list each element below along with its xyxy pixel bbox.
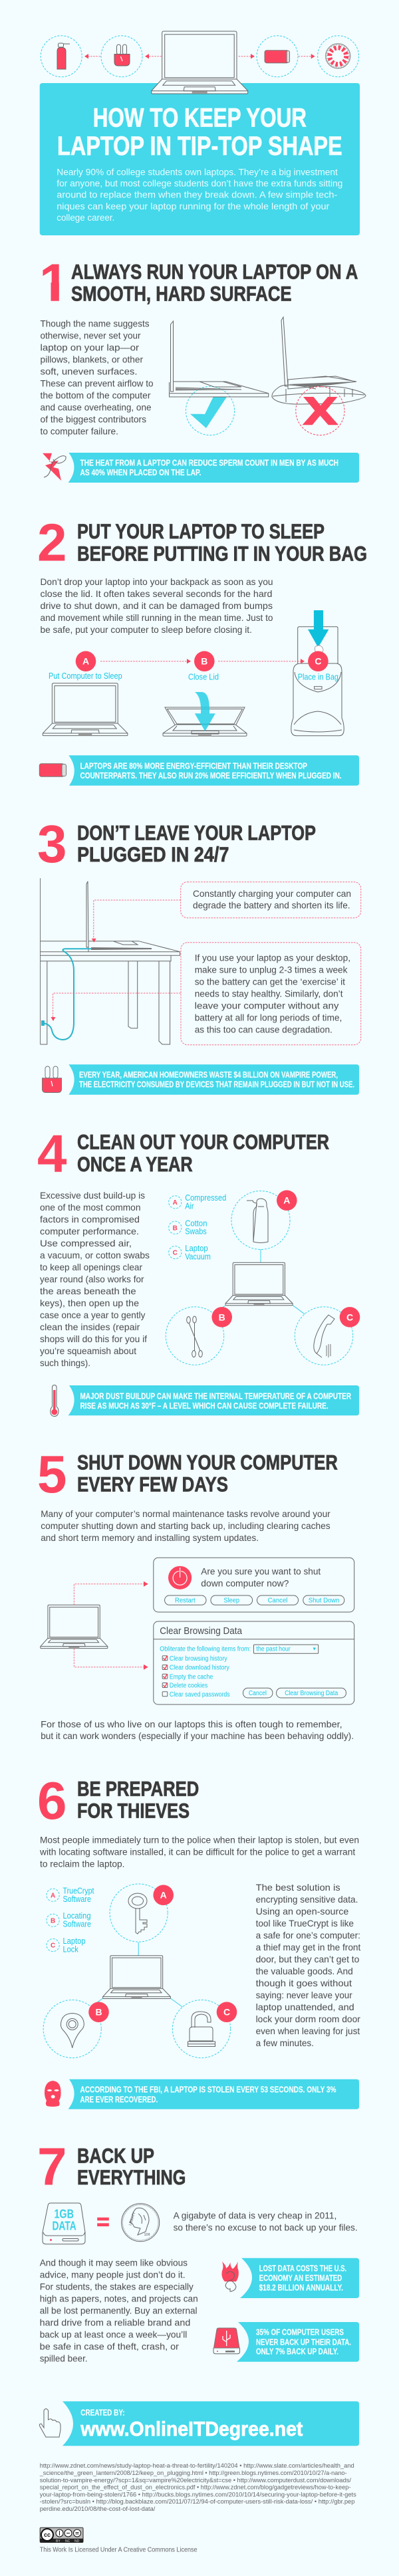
callout text 7b: NEVER BACK UP THEIR DATA.	[256, 2337, 351, 2347]
icon: burning dollar	[222, 2262, 239, 2291]
creative commons badge: ND	[74, 2539, 80, 2543]
side text 6: Using an open-source	[256, 1906, 349, 1917]
clear browsing data dialog	[154, 1621, 354, 1704]
intro text: around to replace them when they break down. A few simple tech-	[57, 189, 338, 200]
heading 3	[77, 820, 316, 866]
body text 2: Don’t drop your laptop into your backpack as soon as you	[40, 576, 273, 587]
callout text 4	[80, 1391, 351, 1411]
references: perdine.edu/2010/08/the-cost-of-lost-data/	[40, 2505, 156, 2512]
hard drive with 1GB data label: DATA	[52, 2218, 76, 2232]
callout box: unplug: battery at all for long periods of time,	[195, 1012, 342, 1023]
legend: security tools: B	[51, 1917, 55, 1925]
body text 4: you’re squeamish about	[40, 1346, 136, 1356]
time range select	[160, 1645, 319, 1653]
legend: cleaning tools: A	[173, 1199, 178, 1207]
body text 4: one of the most common	[40, 1202, 141, 1213]
body text 4: shops will do this for you if	[40, 1334, 147, 1344]
tool C: open padlock: C	[223, 2007, 230, 2018]
checkbox list: Delete cookies	[170, 1683, 207, 1690]
icon: thermometer	[51, 1385, 59, 1416]
heading 6: FOR THIEVES	[77, 1798, 190, 1822]
heading 2: PUT YOUR LAPTOP TO SLEEP	[77, 519, 325, 543]
legend: security tools: C	[51, 1942, 55, 1950]
time range select: the past hour	[256, 1646, 291, 1653]
gigabyte text: so there’s no excuse to not back up your files.	[174, 2222, 358, 2233]
callout box: unplug: make sure to unplug 2-3 times a week	[195, 965, 348, 975]
callout box: charging	[181, 882, 361, 918]
badge C: C	[315, 656, 321, 667]
step labels	[49, 671, 338, 682]
icon: battery	[39, 764, 66, 776]
created by text: CREATED BY:	[80, 2407, 125, 2417]
callout text 1: AS 40% WHEN PLACED ON THE LAP.	[80, 467, 201, 477]
title panel	[40, 83, 360, 235]
body text 4: the areas beneath the	[40, 1286, 136, 1296]
number 1: 1	[39, 253, 69, 312]
legend: cleaning tools	[169, 1193, 226, 1261]
side text 6: encrypting sensitive data.	[256, 1894, 358, 1905]
step labels: Place in Bag	[298, 673, 338, 682]
shutdown dialog	[154, 1558, 354, 1612]
heading 1: SMOOTH, HARD SURFACE	[71, 282, 292, 306]
badge C	[308, 651, 329, 671]
connector lines	[96, 1942, 182, 2007]
body text 7	[40, 2258, 198, 2364]
legend: security tools	[47, 1886, 94, 1954]
callout text 4: RISE AS MUCH AS 30°F – A LEVEL WHICH CAN CAUSE COMPLETE FAILURE.	[80, 1401, 329, 1411]
body text 7: advice, many people just don’t do it.	[40, 2270, 186, 2280]
heading 4: CLEAN OUT YOUR COMPUTER	[77, 1130, 329, 1154]
side text 6: a few minutes.	[256, 2038, 314, 2048]
body text 2: and movement while still running in the mean time. Just to	[40, 612, 273, 623]
legend: cleaning tools: Cotton	[185, 1219, 207, 1228]
icon: power button	[168, 1566, 192, 1589]
body text 7: hard drive from a reliable brand and	[40, 2317, 190, 2328]
references	[39, 2462, 356, 2512]
body text 1: These can prevent airflow to	[40, 378, 154, 389]
body text 4: factors in compromised	[40, 1214, 140, 1225]
gigabyte text: A gigabyte of data is very cheap in 2011,	[174, 2210, 336, 2221]
references: _science/the_green_lantern/2008/12/keep_on_plugging.html • http://green.blogs.nytimes.com/2010/10/27/a-nano-	[39, 2469, 347, 2476]
dialog question	[201, 1566, 321, 1588]
arrows between icons	[84, 54, 315, 59]
callout text 2	[80, 761, 342, 780]
creative commons badge: NC	[65, 2539, 70, 2543]
icon: battery	[257, 36, 298, 77]
number 2: 2	[37, 513, 66, 572]
closing text 5	[41, 1718, 354, 1741]
dialog buttons: Cancel	[268, 1597, 287, 1605]
arrows from laptop to dialogs	[74, 1581, 148, 1670]
badge B	[194, 651, 215, 671]
clear dialog buttons: Clear Browsing Data	[285, 1690, 338, 1697]
arrow into bag	[308, 610, 329, 647]
callout 3	[43, 1064, 359, 1095]
callout text 7a: ECONOMY AN ESTIMATED	[259, 2273, 342, 2283]
checkbox list: Clear browsing history	[170, 1655, 227, 1663]
icon: main laptop	[152, 31, 248, 94]
body text 7: back up at least once a week—you’ll	[40, 2329, 187, 2340]
body text 1: the bottom of the computer	[40, 390, 151, 401]
body text 6: to reclaim the laptop.	[40, 1858, 125, 1869]
heading 2	[77, 519, 367, 565]
time range select: Obliterate the following items from:	[160, 1645, 251, 1653]
tool A: air can	[231, 1190, 297, 1250]
number 4: 4	[37, 1124, 67, 1183]
legend: security tools: TrueCrypt	[63, 1886, 94, 1895]
tool A: air can: A	[283, 1195, 290, 1206]
icon: cooling fan	[318, 36, 359, 77]
heading 4: ONCE A YEAR	[77, 1152, 193, 1176]
desk with laptop illustration	[40, 878, 180, 1044]
side text 6: door, but they can’t get to	[256, 1954, 360, 1964]
side text 6: lock your dorm room door	[256, 2014, 360, 2024]
callout text 1	[80, 458, 338, 477]
side text 6	[256, 1882, 360, 2048]
laptop on pillow with X	[272, 317, 366, 435]
callout box: unplug: as this too can cause degradation.	[195, 1024, 332, 1035]
callout 4	[51, 1385, 359, 1416]
section 7	[37, 2137, 359, 2364]
icon: lightning and sperm	[43, 453, 66, 481]
side text 6: The best solution is	[256, 1882, 340, 1893]
dialog buttons: Restart	[175, 1597, 196, 1605]
number 3: 3	[37, 814, 66, 874]
callout 7b	[213, 2322, 359, 2362]
laptop 4	[225, 1262, 293, 1306]
body text 1	[40, 318, 154, 437]
body text 5: and short term memory and installing system updates.	[41, 1532, 259, 1543]
icon: pointing hand	[39, 2409, 61, 2437]
body text 4: such things).	[40, 1357, 90, 1368]
heading 6: BE PREPARED	[77, 1777, 199, 1801]
section 5	[37, 1445, 354, 1741]
legend: security tools: Locating	[63, 1911, 91, 1921]
callout text 2: LAPTOPS ARE 80% MORE ENERGY-EFFICIENT THAN THEIR DESKTOP	[80, 761, 307, 771]
body text 1: to computer failure.	[40, 426, 118, 437]
body text 4: keys), then open up the	[40, 1298, 139, 1308]
badge A	[76, 651, 96, 671]
power cable	[43, 949, 92, 1040]
callout 7a	[222, 2258, 359, 2298]
icon: dime: LIBERTY	[128, 2212, 136, 2226]
closing text 5: For those of us who live on our laptops this is often tough to remember,	[41, 1718, 342, 1729]
callout text 7b: ONLY 7% BACK UP DAILY.	[256, 2347, 338, 2357]
body text 7: For students, the stakes are especially	[40, 2282, 194, 2292]
intro text	[57, 166, 342, 223]
icon: usb drive	[213, 2328, 239, 2354]
tool C: vacuum	[295, 1307, 360, 1365]
body text 4: year round (also works for	[40, 1274, 144, 1284]
dialog buttons: Sleep	[223, 1597, 239, 1605]
clear dialog buttons	[243, 1688, 346, 1698]
intro text: Nearly 90% of college students own laptops. They’re a big investment	[57, 166, 338, 177]
creative commons badge: BY	[56, 2539, 61, 2543]
icon: compressed air can	[41, 36, 82, 77]
step A laptop	[43, 683, 128, 736]
body text 2	[40, 576, 273, 635]
tool C: vacuum: C	[346, 1312, 353, 1322]
heading 3: DON’T LEAVE YOUR LAPTOP	[77, 820, 316, 844]
legend: cleaning tools: Laptop	[185, 1244, 208, 1253]
intro text: for anyone, but most college students don’t have the extra funds sitting	[57, 178, 342, 189]
icon: thief mask	[45, 2081, 61, 2107]
step C backpack	[291, 610, 344, 736]
callout text 7a: LOST DATA COSTS THE U.S.	[259, 2264, 346, 2274]
body text 7: high as papers, notes, and projects can	[40, 2293, 198, 2304]
equals sign	[97, 2218, 109, 2226]
callout text 7b: 35% OF COMPUTER USERS	[256, 2327, 344, 2337]
tool B: location pin	[43, 2000, 109, 2058]
body text 7: be safe in case of theft, crash, or	[40, 2341, 179, 2352]
callout box: unplug	[181, 943, 361, 1045]
legend: security tools: A	[51, 1892, 55, 1900]
body text 4: clean the insides (repair	[40, 1322, 140, 1332]
heading 3: PLUGGED IN 24/7	[77, 842, 229, 866]
clear dialog buttons: Cancel	[249, 1690, 267, 1697]
body text 4: Excessive dust build-up is	[40, 1190, 145, 1201]
laptop 6	[103, 1956, 170, 1999]
tool B: cotton swabs: B	[219, 1312, 225, 1322]
body text 4: case once a year to gently	[40, 1310, 145, 1320]
body text 1: pillows, blankets, or other	[40, 354, 143, 365]
side text 6: the valuable goods. And	[256, 1966, 353, 1976]
number 7: 7	[37, 2137, 66, 2196]
body text 7: And though it may seem like obvious	[40, 2258, 188, 2268]
body text 1: laptop on your lap—or	[40, 342, 139, 353]
number 1	[43, 265, 59, 301]
body text 2: drive to shut down, and it can be damaged from bumps	[40, 600, 273, 611]
callout text 3	[79, 1070, 354, 1090]
checkbox list: Clear saved passwords	[170, 1691, 230, 1698]
connector lines	[219, 1249, 305, 1314]
callout text 7a	[259, 2264, 346, 2292]
tool B: location pin: B	[95, 2007, 102, 2018]
callout box: unplug: leave your computer without any	[195, 1000, 338, 1011]
closing text 5: but it can work wonders (especially if your machine has been behaving oddly).	[41, 1730, 354, 1741]
created by text	[80, 2407, 303, 2440]
body text 6: with locating software installed, it can be difficult for the police to get a warrant	[39, 1846, 355, 1857]
heading 1	[71, 259, 358, 306]
callout box: unplug: so the battery can get the ‘exercise’ it	[195, 977, 345, 987]
legend: security tools: Laptop	[63, 1936, 86, 1946]
callout 6	[45, 2079, 359, 2109]
created by text: www.OnlineITDegree.net	[80, 2417, 303, 2440]
icon: dime: 10¢	[144, 2233, 150, 2237]
references: special_report_on_the_effect_of_dust_on_electronics.pdf • http://www.zdnet.com/blog/gadgetreviews/how-to-keep-	[40, 2484, 350, 2491]
checkbox list	[162, 1655, 230, 1698]
legend: security tools: Software	[63, 1895, 91, 1904]
number 6: 6	[37, 1771, 66, 1830]
dialog question: Are you sure you want to shut	[201, 1566, 321, 1576]
callout 2	[39, 755, 359, 786]
created by banner	[39, 2401, 359, 2446]
gigabyte text	[174, 2210, 358, 2233]
badge B: B	[201, 656, 207, 667]
badge A: A	[82, 656, 89, 667]
dialog question: down computer now?	[201, 1578, 289, 1588]
pointer to outlet	[51, 993, 181, 1021]
body text 4: to keep all openings clear	[40, 1262, 142, 1272]
body text 5	[41, 1508, 331, 1543]
tool B: cotton swabs	[166, 1307, 232, 1365]
legend: cleaning tools: Air	[185, 1202, 194, 1211]
body text 1: otherwise, never set your	[40, 330, 141, 341]
section 6	[37, 1771, 360, 2109]
heading 6	[77, 1777, 199, 1822]
side text 6: a thief may get in the front	[256, 1942, 360, 1952]
icon: plug	[43, 1066, 61, 1093]
laptop on hard surface with check	[169, 321, 269, 435]
license text: This Work Is Licensed Under A Creative Commons License	[40, 2546, 198, 2554]
dialog buttons	[165, 1595, 344, 1605]
callout text 7a: $18.2 BILLION ANNUALLY.	[259, 2282, 343, 2292]
intro text: college career.	[57, 212, 114, 223]
laptop 5	[41, 1605, 108, 1649]
dialog buttons: Shut Down	[309, 1597, 340, 1605]
icon: dime	[122, 2204, 160, 2242]
references: -stolen/?src=busln • http://blog.backblaze.com/2011/07/12/94-of-computer-users-still-risk-data-loss/ • http://gbr.pep	[40, 2498, 354, 2505]
body text 7: spilled beer.	[40, 2353, 88, 2364]
body text 6	[39, 1834, 359, 1869]
icon: plug	[101, 36, 142, 77]
heading 7	[77, 2143, 186, 2189]
creative commons badge	[40, 2527, 84, 2543]
header icons row	[41, 36, 359, 77]
section 2	[37, 513, 367, 786]
body text 2: be safe, put your computer to sleep before closing it.	[40, 624, 252, 635]
legend: cleaning tools: B	[173, 1225, 178, 1232]
hard drive with 1GB data label: 1GB	[54, 2207, 74, 2221]
callout text 6	[80, 2085, 336, 2104]
callout box: unplug: If you use your laptop as your desktop,	[195, 953, 350, 963]
heading 5: EVERY FEW DAYS	[77, 1472, 228, 1496]
tool A: key	[110, 1884, 174, 1942]
callout box: charging: degrade the battery and shorten its life.	[193, 900, 350, 911]
legend: cleaning tools: Compressed	[185, 1193, 226, 1203]
heading 7: EVERYTHING	[77, 2165, 186, 2189]
body text 5: computer shutting down and starting back up, including clearing caches	[41, 1520, 331, 1531]
callout box: charging: Constantly charging your computer can	[193, 888, 351, 899]
references: http://www.zdnet.com/news/study-laptop-heat-a-threat-to-fertility/140204 • http://www.slate.com/articles/health_and	[40, 2462, 354, 2469]
step B laptop closing	[163, 692, 247, 736]
references: your-laptop-from-being-stolen/1766 • http://bucks.blogs.nytimes.com/2010/10/14/securing-your-laptop-before-it-gets	[40, 2490, 356, 2498]
number 5: 5	[37, 1445, 66, 1504]
heading 4	[77, 1130, 329, 1176]
legend: cleaning tools: Vacuum	[185, 1252, 211, 1261]
tool A: key: A	[160, 1890, 167, 1901]
callout text 7b	[256, 2327, 351, 2357]
step labels: Put Computer to Sleep	[49, 671, 122, 681]
callout text 6: ARE EVER RECOVERED.	[80, 2094, 158, 2104]
body text 1: soft, uneven surfaces.	[40, 366, 137, 377]
body text 7: all be lost permanently. Buy an external	[40, 2305, 198, 2316]
title: LAPTOP IN TIP-TOP SHAPE	[57, 132, 342, 161]
side text 6: saying: never leave your	[256, 1990, 352, 2000]
legend: security tools: Software	[63, 1920, 91, 1929]
body text 4: Use compressed air,	[40, 1238, 132, 1248]
body text 4	[40, 1190, 150, 1368]
body text 5: Many of your computer’s normal maintenance tasks revolve around your	[41, 1508, 331, 1519]
body text 1: and cause overheating, one	[40, 402, 152, 413]
body text 6: Most people immediately turn to the police when their laptop is stolen, but even	[40, 1834, 359, 1845]
checkbox list: Empty the cache	[170, 1673, 213, 1681]
body text 1: Though the name suggests	[40, 318, 149, 329]
heading 5	[77, 1451, 338, 1496]
body text 1: of the biggest contributors	[40, 414, 146, 425]
creative commons badge: cc	[44, 2531, 51, 2538]
hard drive with 1GB data label	[43, 2203, 85, 2244]
body text 4: a vacuum, or cotton swabs	[40, 1250, 150, 1260]
tool C: open padlock	[172, 2000, 237, 2058]
side text 6: though it goes without	[256, 1978, 352, 1988]
step labels: Close Lid	[188, 673, 219, 682]
pointer to laptop	[92, 900, 181, 943]
heading 5: SHUT DOWN YOUR COMPUTER	[77, 1451, 338, 1474]
checkbox list: Clear download history	[170, 1665, 229, 1672]
dialog title: Clear Browsing Data	[160, 1626, 243, 1637]
section 1	[39, 253, 366, 483]
legend: cleaning tools: C	[173, 1250, 178, 1257]
step flow with badges	[49, 651, 338, 682]
section 4	[37, 1124, 360, 1416]
heading 7: BACK UP	[77, 2143, 154, 2167]
section 3	[37, 814, 361, 1095]
title	[57, 104, 342, 161]
intro text: niques can keep your laptop running for the whole length of your	[57, 201, 330, 211]
body text 2: close the lid. It often takes several seconds for the hard	[40, 588, 273, 599]
side text 6: tool like TrueCrypt is like	[256, 1918, 354, 1929]
legend: security tools: Lock	[63, 1945, 78, 1954]
side text 6: laptop unattended, and	[256, 2002, 354, 2012]
side text 6: a safe for one’s computer:	[256, 1930, 360, 1940]
body text 4: computer performance.	[40, 1226, 139, 1236]
callout box: unplug: needs to stay healthy. Similarly, don’t	[195, 989, 343, 999]
side text 6: even when leaving for just	[256, 2026, 360, 2036]
title: HOW TO KEEP YOUR	[93, 104, 307, 133]
callout 1	[43, 453, 359, 483]
references: solution-to-vampire-energy/?scp=1&sq=vampire%20electricity&st=cse • http://www.computerdust.com/downloads/	[40, 2476, 351, 2484]
arrow closing lid	[195, 692, 215, 731]
legend: cleaning tools: Swabs	[185, 1227, 207, 1236]
